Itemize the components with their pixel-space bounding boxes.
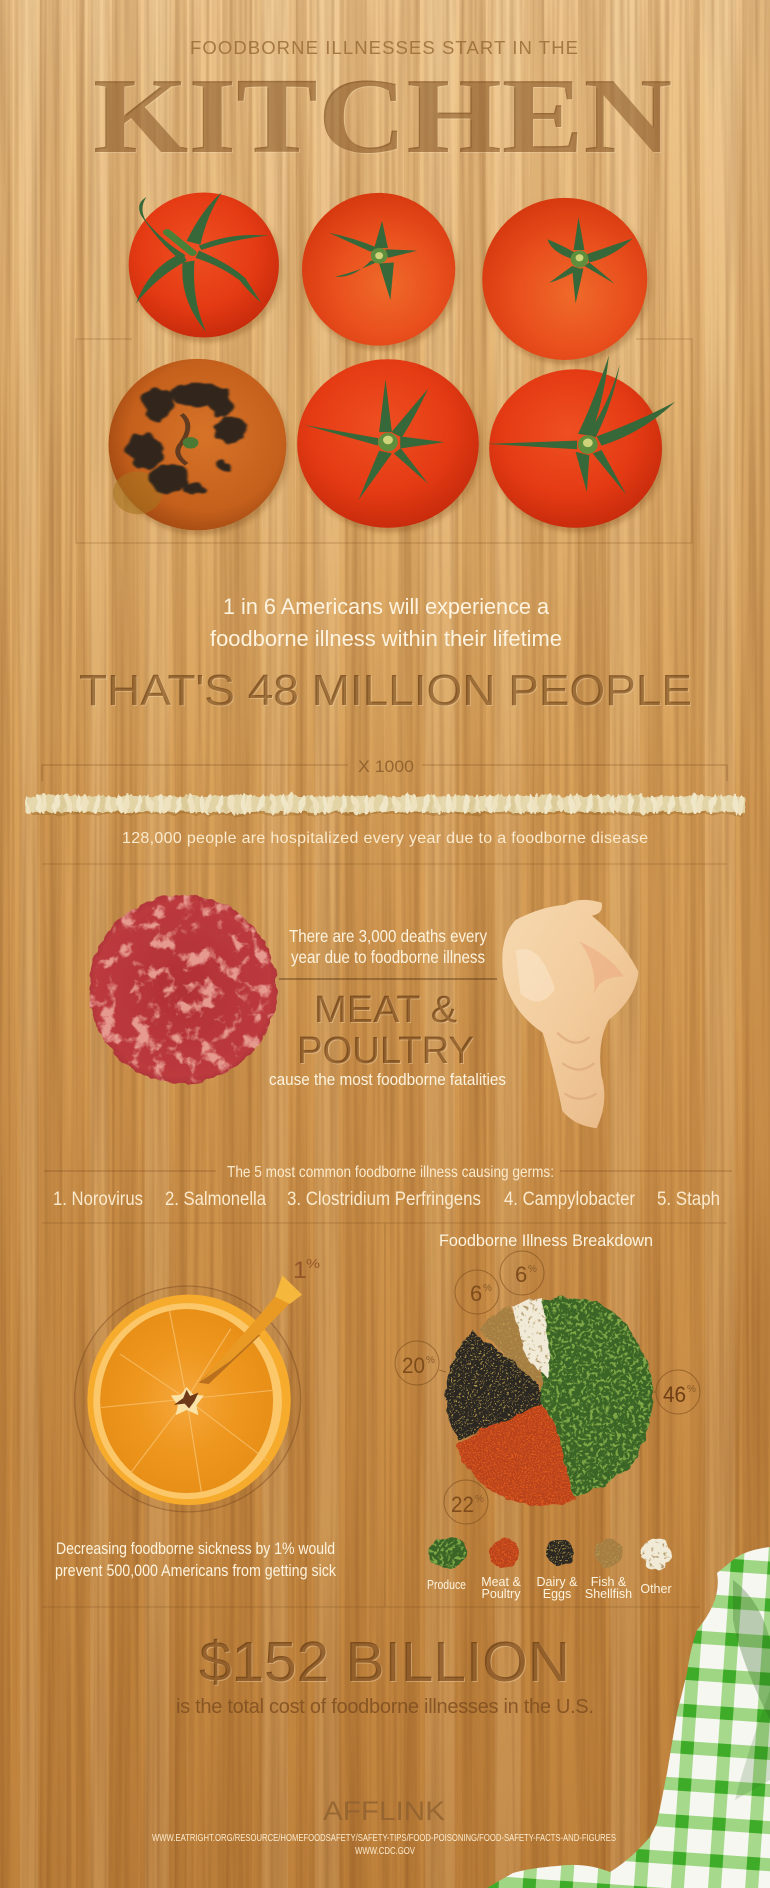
label: 22 percent: % (475, 1494, 484, 1505)
heading: 48 million people: THAT'S 48 MILLION PEOPLE (79, 666, 692, 715)
title main word: KITCHEN (93, 57, 672, 176)
orange wedge: 1 percent (199, 1275, 302, 1384)
tomatoes (109, 192, 675, 535)
germ 1: 1. Norovirus (53, 1188, 143, 1210)
legend: fish and shellfish: Shellfish (585, 1587, 632, 1601)
germ 3: 3. Clostridium Perfringens (287, 1188, 481, 1210)
statement line 1: 1 in 6 Americans will experience a (223, 594, 550, 619)
heading: meat and poultry: MEAT & (314, 989, 457, 1031)
label: 1 percent: 1 (293, 1257, 307, 1284)
germ 5: 5. Staph (657, 1188, 720, 1210)
divider (42, 863, 727, 865)
label: 46 percent (652, 1370, 700, 1414)
orange slice (87, 1295, 291, 1505)
heading: meat and poultry (297, 989, 474, 1072)
legend: dairy and eggs: Eggs (543, 1587, 571, 1601)
legend: other (640, 1539, 672, 1596)
rice scale bracket (42, 765, 727, 781)
label: 46 percent: % (687, 1384, 696, 1395)
legend: dairy and eggs: Dairy & (537, 1575, 578, 1589)
label: 6 percent fish (455, 1270, 499, 1314)
germ 2: 2. Salmonella (165, 1188, 266, 1210)
slice: other 6 percent (510, 1298, 549, 1378)
tomato 5 (297, 359, 479, 528)
text: decreasing sickness: prevent 500,000 Americans from getting sick (55, 1561, 336, 1580)
label: 6 percent fish: % (483, 1283, 492, 1294)
pie chart of spices (445, 1298, 652, 1505)
text: fatalities: cause the most foodborne fatalities (269, 1070, 506, 1089)
frame around tomatoes (76, 339, 692, 543)
legend: dairy and eggs (537, 1538, 578, 1601)
legend: meat and poultry (481, 1538, 521, 1601)
tomato 1 (129, 192, 279, 337)
panel: common germs (44, 1164, 732, 1210)
panel: meat and poultry text (269, 926, 506, 1089)
dividers (42, 1223, 727, 1607)
label: 46 percent: 46 (663, 1382, 686, 1407)
text: total cost: is the total cost of foodborne illnesses in the U.S. (176, 1696, 594, 1718)
legend: fish and shellfish: Fish & (591, 1575, 627, 1589)
rice row (27, 792, 745, 816)
slice: fish and shellfish 6 percent (478, 1306, 545, 1382)
label: 1 percent (293, 1256, 321, 1284)
text: decreasing sickness (55, 1539, 336, 1580)
checkered towel (480, 1540, 770, 1888)
slice: dairy and eggs 20 percent (445, 1331, 545, 1440)
title kicker: FOODBORNE ILLNESSES START IN THE (190, 37, 578, 58)
label: 6 percent fish: 6 (470, 1281, 482, 1306)
title (93, 37, 672, 176)
heading: 152 billion: $152 BILLION (199, 1630, 570, 1694)
tomato shadows (111, 197, 664, 535)
statement line 2: foodborne illness within their lifetime (210, 626, 562, 651)
statement: 1 in 6 Americans (210, 594, 562, 651)
legend: meat and poultry: Meat & (481, 1575, 521, 1589)
text: deaths (289, 926, 487, 967)
germs rules (44, 1170, 732, 1172)
slice: produce 46 percent (540, 1298, 652, 1497)
slice: meat and poultry 22 percent (456, 1398, 575, 1505)
source url 1: WWW.EATRIGHT.ORG/RESOURCE/HOMEFOODSAFETY/SAFETY-TIPS/FOOD-POISONING/FOOD-SAFETY-FACTS-AND-FIGURES (152, 1833, 616, 1844)
label: 22 percent (444, 1480, 488, 1524)
legend: produce (427, 1538, 467, 1592)
label: 20 percent: % (426, 1355, 435, 1366)
source url 2: WWW.CDC.GOV (355, 1846, 415, 1857)
label: 6 percent other: 6 (515, 1262, 527, 1287)
text: decreasing sickness: Decreasing foodborne sickness by 1% would (56, 1539, 335, 1558)
label: x 1000: X 1000 (358, 757, 414, 776)
legend: other: Other (640, 1582, 672, 1596)
chicken drumstick (502, 900, 638, 1128)
rule (279, 978, 497, 980)
text: hospitalized: 128,000 people are hospitalized every year due to a foodborne disease (122, 830, 648, 847)
tomato 3 (482, 198, 647, 360)
tomato 2 (302, 193, 455, 346)
pie percentage labels (395, 1251, 700, 1524)
germ 4: 4. Campylobacter (504, 1188, 635, 1210)
label: 6 percent other (500, 1251, 544, 1295)
germs heading: The 5 most common foodborne illness causing germs: (227, 1164, 554, 1181)
logo: afflink: AFFLINK (323, 1796, 445, 1826)
tomato 6 (487, 355, 675, 528)
meat patty (89, 895, 277, 1083)
legend: fish and shellfish (585, 1539, 632, 1601)
text: deaths: year due to foodborne illness (291, 947, 485, 967)
label: 6 percent other: % (528, 1264, 537, 1275)
sources (152, 1833, 616, 1857)
heading: meat and poultry: POULTRY (297, 1030, 474, 1072)
label: 20 percent: 20 (402, 1353, 425, 1378)
label: 22 percent: 22 (451, 1492, 474, 1517)
label: 1 percent: % (306, 1256, 321, 1271)
plate (75, 1286, 301, 1512)
orange on plate (75, 1275, 302, 1512)
legend (427, 1538, 672, 1601)
text: deaths: There are 3,000 deaths every (289, 926, 487, 946)
legend: meat and poultry: Poultry (482, 1587, 521, 1601)
label: 20 percent (395, 1341, 446, 1385)
heading: breakdown: Foodborne Illness Breakdown (439, 1231, 653, 1250)
legend: produce: Produce (427, 1577, 466, 1592)
tomato 4: rotten (109, 359, 286, 530)
